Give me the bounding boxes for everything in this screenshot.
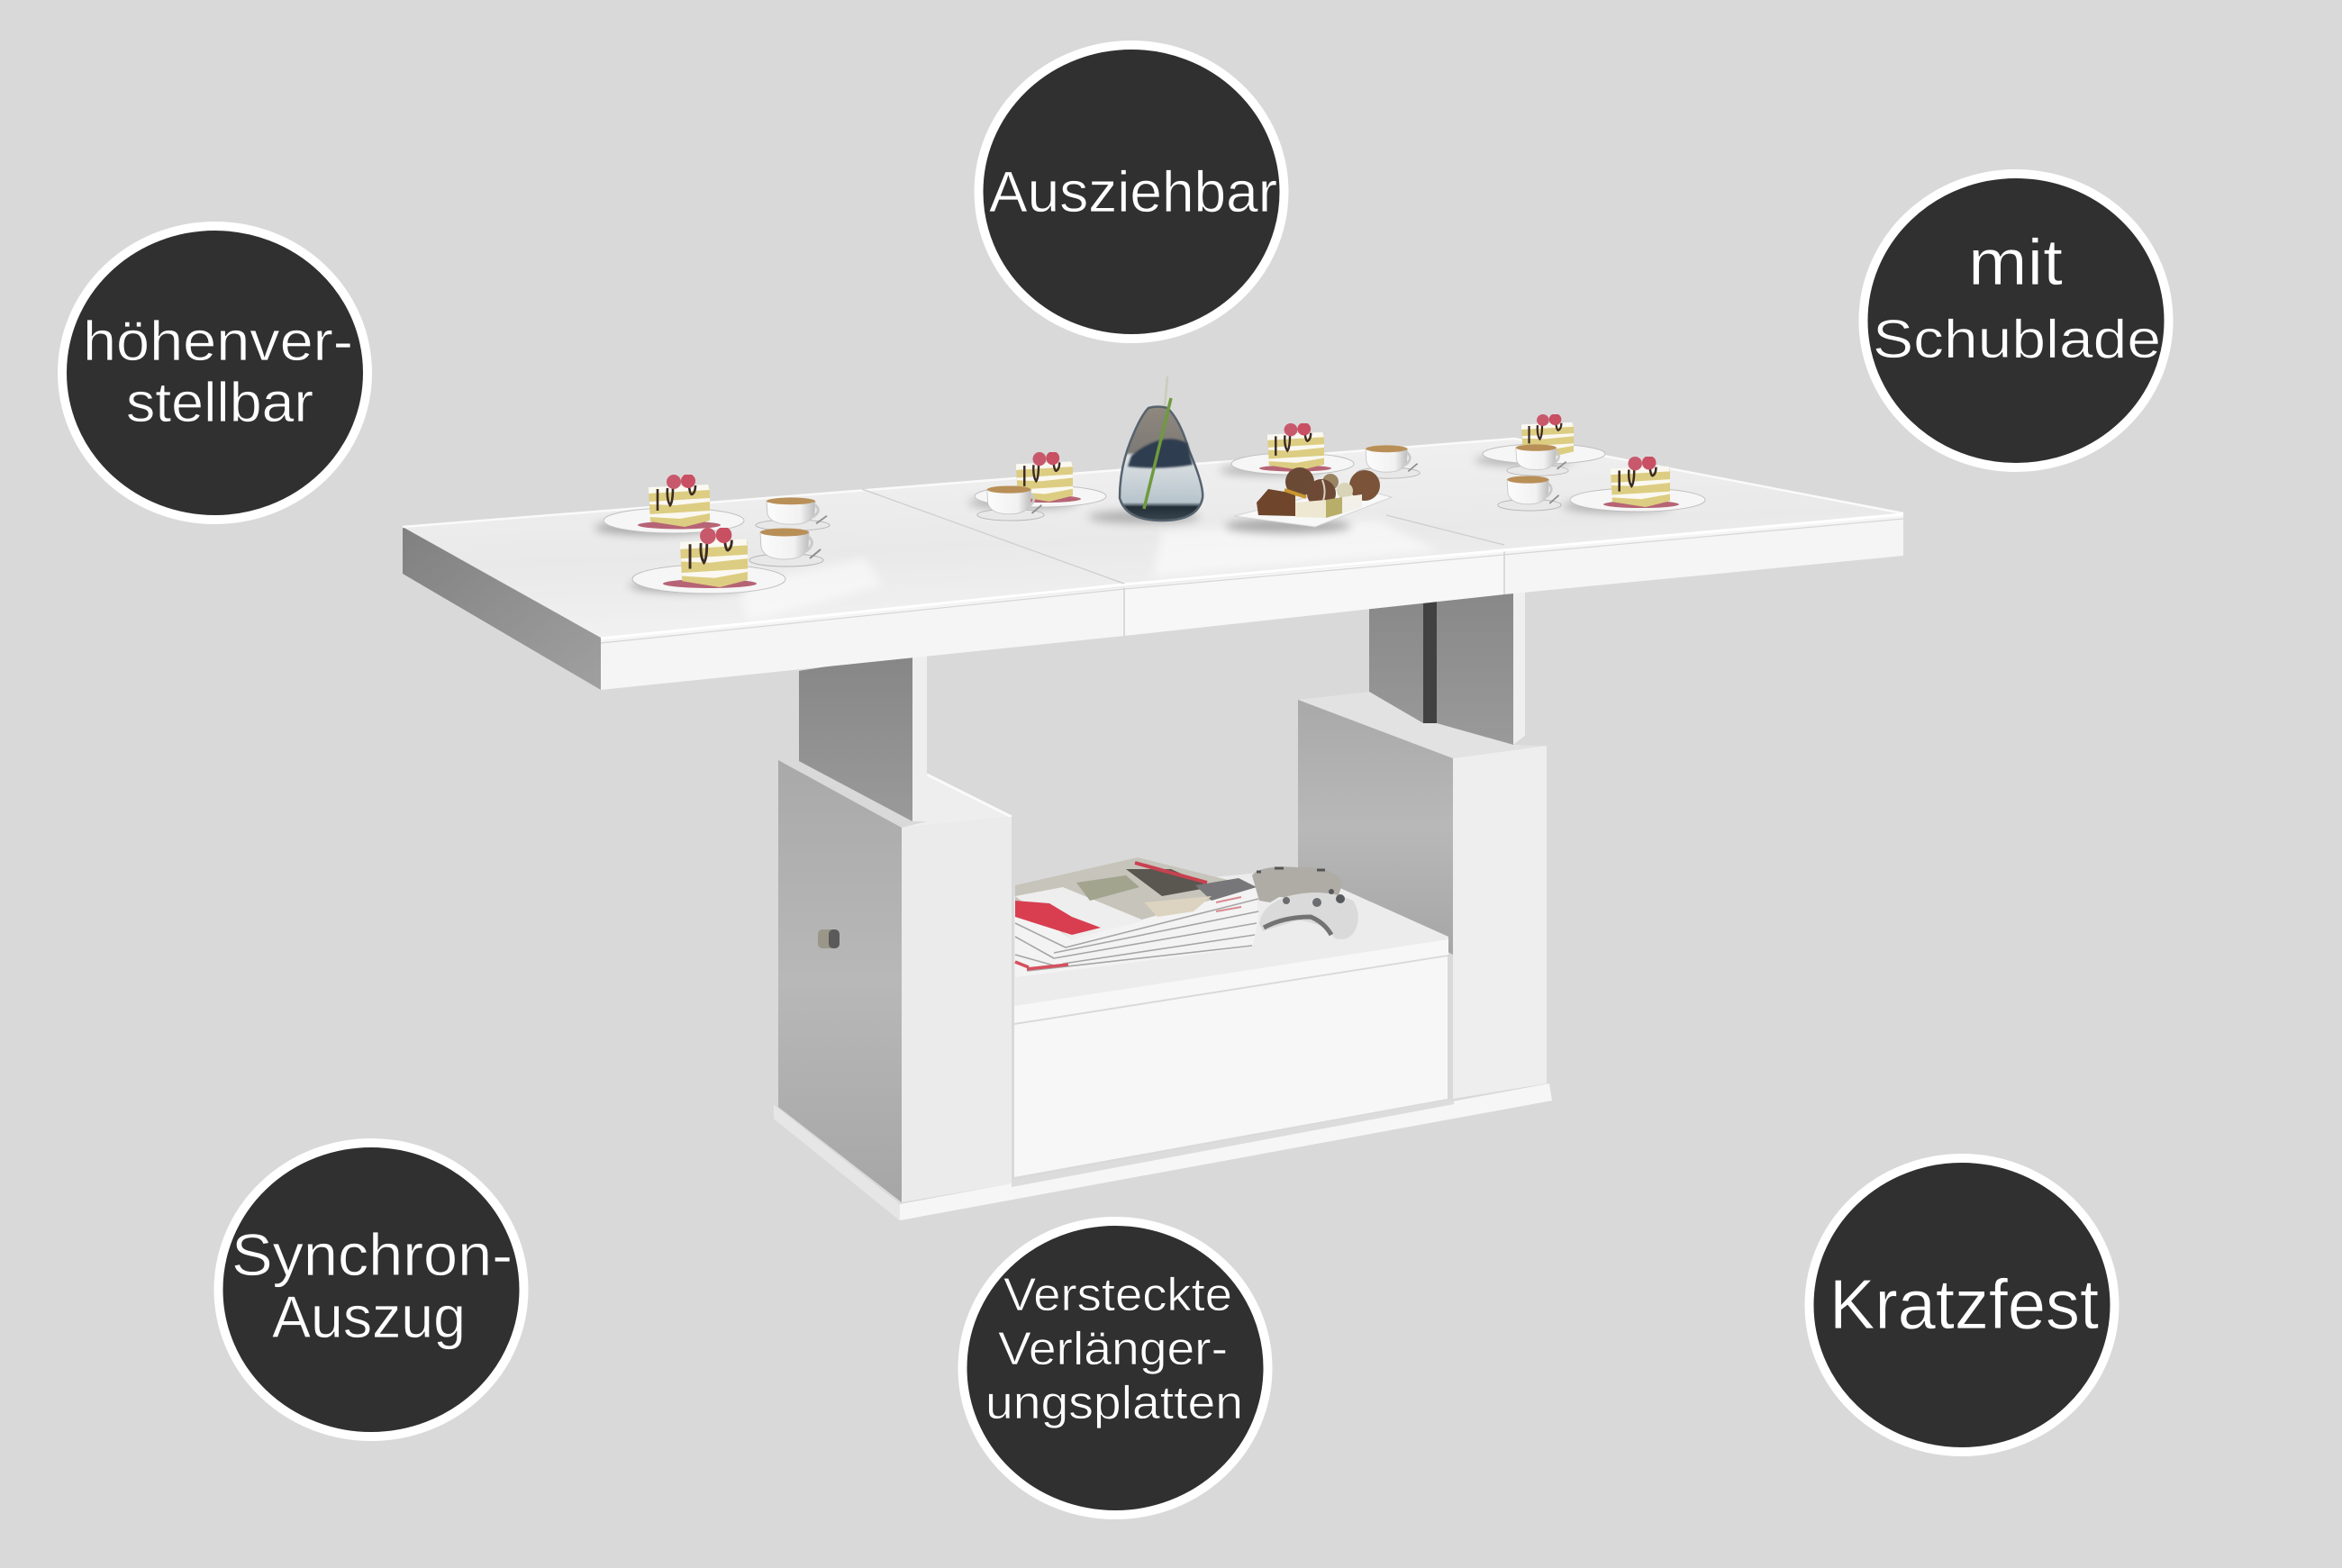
badge: mit Schublade bbox=[1863, 174, 2169, 467]
left pedestal bbox=[778, 760, 1012, 1202]
side knob bbox=[818, 929, 840, 948]
badge: mit Schublade: mit bbox=[1968, 227, 2063, 299]
badge: Versteckte Verlängerungsplatten: ungsplatten bbox=[985, 1377, 1243, 1429]
cake plate 1 bbox=[595, 474, 744, 535]
badge: Synchron-Auszug bbox=[218, 1143, 524, 1437]
table left side bbox=[403, 527, 601, 690]
badge: Synchron-Auszug: Auszug bbox=[272, 1283, 466, 1350]
badge: Synchron-Auszug: Synchron- bbox=[231, 1221, 513, 1288]
storage shelf bbox=[1014, 869, 1448, 1023]
badge: Ausziehbar bbox=[978, 45, 1284, 339]
badge: höhenverstellbar bbox=[62, 226, 368, 520]
chocolates plate bbox=[1225, 467, 1392, 533]
cake plate 3 bbox=[968, 451, 1106, 509]
cake plate 6 bbox=[1563, 456, 1705, 512]
cake plate 5 bbox=[1475, 413, 1605, 466]
badge: Kratzfest: Kratzfest bbox=[1829, 1264, 2099, 1344]
cake plate 4 bbox=[1220, 422, 1354, 476]
badge: Kratzfest bbox=[1809, 1158, 2115, 1452]
cake plate 2 bbox=[630, 527, 785, 594]
cup 1 bbox=[756, 497, 830, 530]
drawer front bbox=[1012, 956, 1454, 1187]
vase bbox=[1088, 376, 1203, 523]
badge: Versteckte Verlängerungsplatten: Versteckte bbox=[1003, 1269, 1232, 1321]
magazine stack bbox=[1015, 857, 1258, 977]
badge: Ausziehbar: Ausziehbar bbox=[989, 159, 1277, 224]
badge: höhenverstellbar: stellbar bbox=[126, 372, 313, 434]
cup 6 bbox=[1498, 476, 1561, 511]
badge: mit Schublade: Schublade bbox=[1873, 309, 2161, 369]
left rear leg bbox=[799, 650, 927, 821]
table top surface bbox=[403, 439, 1903, 643]
right rear leg bbox=[1369, 576, 1525, 745]
table base plinth bbox=[774, 1083, 1552, 1220]
badge: höhenverstellbar: höhenver- bbox=[83, 311, 353, 373]
table front edge panels bbox=[601, 513, 1903, 690]
cup 3 bbox=[977, 485, 1044, 521]
right pedestal bbox=[1298, 692, 1547, 1099]
badge: Versteckte Verlängerungsplatten bbox=[962, 1221, 1268, 1515]
cup 5 bbox=[1507, 444, 1568, 476]
game controllers bbox=[1252, 866, 1358, 939]
table illustration bbox=[403, 376, 1903, 1220]
cup 4 bbox=[1357, 445, 1420, 478]
badge: Versteckte Verlängerungsplatten: Verlänger- bbox=[998, 1323, 1228, 1375]
cup 2 bbox=[749, 528, 823, 566]
